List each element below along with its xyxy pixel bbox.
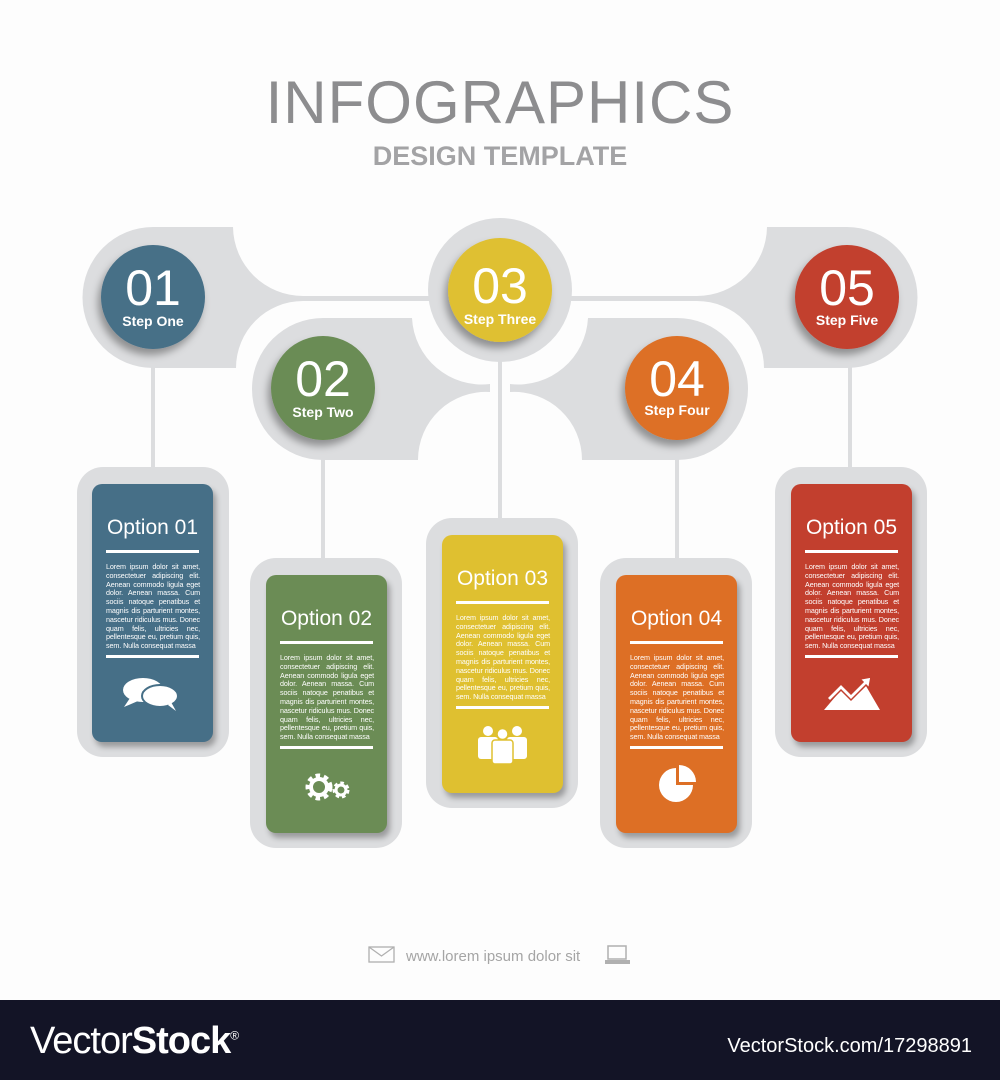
icon: laptop (605, 945, 630, 964)
step 01 (101, 245, 205, 349)
card 04 (616, 575, 737, 833)
watermark bar: VectorStock® (30, 1020, 238, 1062)
title: INFOGRAPHICS (266, 69, 734, 136)
step 01: 01 (125, 260, 181, 316)
step 04 (625, 336, 729, 440)
icon: envelope (368, 946, 395, 963)
step 03: 03 (472, 258, 528, 314)
subtitle: DESIGN TEMPLATE (373, 141, 627, 171)
card 05 (791, 484, 912, 742)
step circles (94, 238, 900, 450)
card 05: Option 05 (806, 516, 897, 539)
card 02: Option 02 (281, 607, 372, 630)
icon: chart up (824, 678, 880, 710)
step 02 (271, 336, 375, 440)
icon: pie chart (659, 765, 696, 802)
card 01: Option 01 (107, 516, 198, 539)
card 02 (266, 575, 387, 833)
step 03 (448, 238, 552, 342)
watermark bar: VectorStock.com/17298891 (727, 1035, 972, 1057)
footer link (368, 945, 630, 965)
step 03: Step Three (464, 311, 536, 327)
card 05: Lorem ipsum dolor sit amet, consectetuer adipiscing elit. Aenean commodo ligula eget dolor. Aenean massa. Cum sociis natoque penatibus et magnis dis parturient montes, nascetur ridiculus mus. Donec quam felis, ultricies nec, pellentesque eu, pretium quis, sem. Nulla consequat massa (805, 562, 899, 650)
step 04: 04 (649, 351, 705, 407)
card 02: Lorem ipsum dolor sit amet, consectetuer adipiscing elit. Aenean commodo ligula eget dolor. Aenean massa. Cum sociis natoque penatibus et magnis dis parturient montes, nascetur ridiculus mus. Donec quam felis, ultricies nec, pellentesque eu, pretium quis, sem. Nulla consequat massa (280, 653, 374, 741)
card 03: Lorem ipsum dolor sit amet, consectetuer adipiscing elit. Aenean commodo ligula eget dolor. Aenean massa. Cum sociis natoque penatibus et magnis dis parturient montes, nascetur ridiculus mus. Donec quam felis, ultricies nec, pellentesque eu, pretium quis, sem. Nulla consequat massa (456, 613, 550, 701)
footer link: www.lorem ipsum dolor sit (406, 948, 580, 965)
panel: option 02 (250, 558, 402, 848)
card 03: Option 03 (457, 567, 548, 590)
step 05: 05 (819, 260, 875, 316)
icon: gears (306, 774, 350, 800)
step 04: Step Four (644, 402, 710, 418)
card 01: Lorem ipsum dolor sit amet, consectetuer adipiscing elit. Aenean commodo ligula eget dolor. Aenean massa. Cum sociis natoque penatibus et magnis dis parturient montes, nascetur ridiculus mus. Donec quam felis, ultricies nec, pellentesque eu, pretium quis, sem. Nulla consequat massa (106, 562, 200, 650)
card 01 (92, 484, 213, 742)
panel: option 05 (775, 467, 927, 757)
step 02: 02 (295, 351, 351, 407)
card 04: Option 04 (631, 607, 722, 630)
step 02: Step Two (292, 404, 354, 420)
icon: people (478, 726, 527, 764)
step 05 (795, 245, 899, 349)
card 04: Lorem ipsum dolor sit amet, consectetuer adipiscing elit. Aenean commodo ligula eget dolor. Aenean massa. Cum sociis natoque penatibus et magnis dis parturient montes, nascetur ridiculus mus. Donec quam felis, ultricies nec, pellentesque eu, pretium quis, sem. Nulla consequat massa (630, 653, 724, 741)
step 01: Step One (122, 313, 184, 329)
icon: chat bubbles (123, 678, 177, 711)
card 03 (442, 535, 563, 793)
panel: option 01 (77, 467, 229, 757)
panel: option 04 (600, 558, 752, 848)
step 05: Step Five (816, 312, 878, 328)
panel: option 03 (426, 518, 578, 808)
watermark bar (0, 1000, 1000, 1080)
